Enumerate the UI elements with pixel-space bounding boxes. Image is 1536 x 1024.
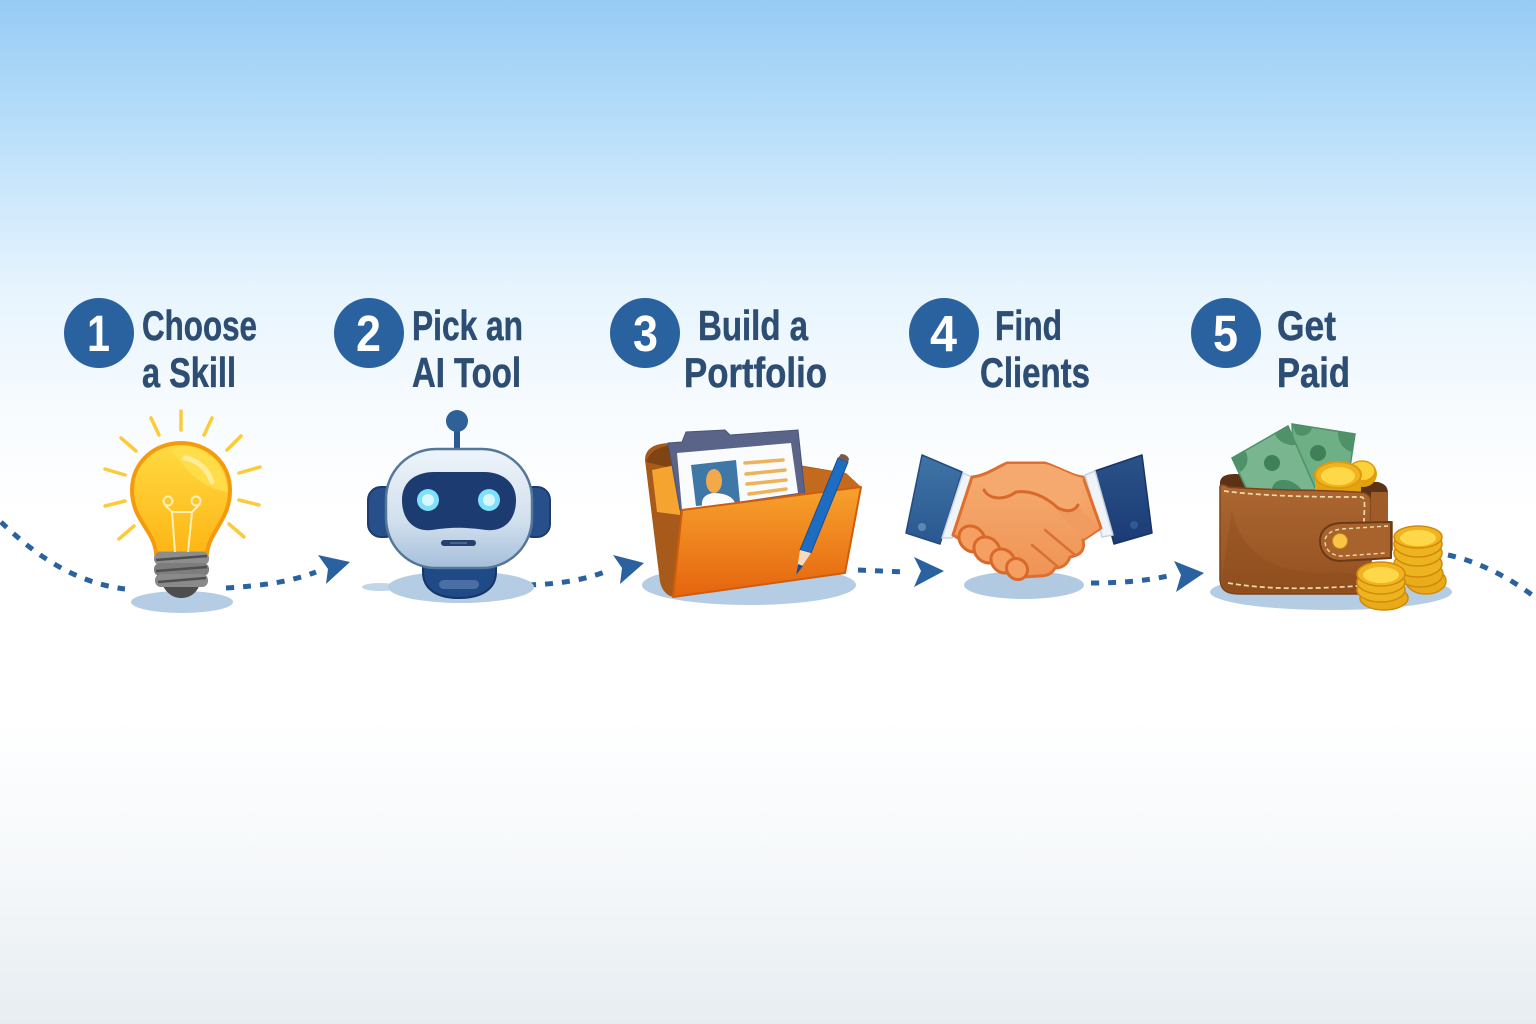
heading: Choose a Skill: Choose: [142, 302, 257, 349]
heading: Get Paid: Get: [1277, 302, 1336, 349]
number badge 1: [64, 298, 134, 368]
number badge 3: [610, 298, 680, 368]
heading: Pick an AI Tool: Pick an: [412, 302, 523, 349]
heading: Build a Portfolio: Portfolio: [684, 349, 827, 396]
heading: Get Paid: Paid: [1277, 349, 1350, 396]
step 2: pick an AI tool: [334, 298, 550, 603]
icon: handshake: [906, 455, 1152, 599]
heading: Pick an AI Tool: [412, 302, 523, 396]
number badge 1: 1: [87, 305, 110, 362]
dotted path and arrow: step 4 to 5: [1091, 561, 1204, 592]
heading: Build a Portfolio: Build a: [698, 302, 808, 349]
dotted path and arrow: step 2 to 3: [528, 555, 644, 585]
step 4: find clients: [906, 298, 1152, 599]
heading: Choose a Skill: [142, 302, 257, 396]
dotted path: leaving step 5: [1448, 555, 1536, 598]
coins in wallet: [1315, 461, 1377, 492]
heading: Choose a Skill: a Skill: [142, 349, 236, 396]
number badge 5: 5: [1213, 305, 1238, 362]
number badge 3: 3: [633, 305, 658, 362]
wallet strap and button: [1320, 522, 1391, 561]
heading: Find Clients: Find: [995, 302, 1062, 349]
icon: light bulb: [105, 411, 260, 613]
icon: robot: [362, 410, 550, 603]
profile photo: [691, 460, 740, 506]
icon: wallet with money and coins: [1210, 424, 1452, 610]
heading: Pick an AI Tool: AI Tool: [412, 349, 521, 396]
number badge 5: [1191, 298, 1261, 368]
number badge 4: [909, 298, 979, 368]
number badge 4: 4: [930, 305, 958, 362]
step 1: choose a skill: [64, 298, 260, 613]
dotted path: entering step 1: [1, 522, 125, 589]
number badge 2: 2: [356, 305, 381, 362]
heading: Build a Portfolio: [684, 302, 827, 396]
heading: Find Clients: [980, 302, 1090, 396]
icon: folder with profile and pencil: [642, 430, 861, 605]
banknotes: [1232, 424, 1355, 490]
step 3: build a portfolio: [610, 298, 861, 605]
number badge 2: [334, 298, 404, 368]
pencil: [796, 454, 849, 575]
coin stacks: [1357, 526, 1446, 610]
step 5: get paid: [1191, 298, 1452, 610]
heading: Find Clients: Clients: [980, 349, 1090, 396]
heading: Get Paid: [1277, 302, 1350, 396]
dotted path and arrow: step 1 to 2: [226, 555, 350, 588]
dotted path and arrow: step 3 to 4: [858, 557, 944, 587]
